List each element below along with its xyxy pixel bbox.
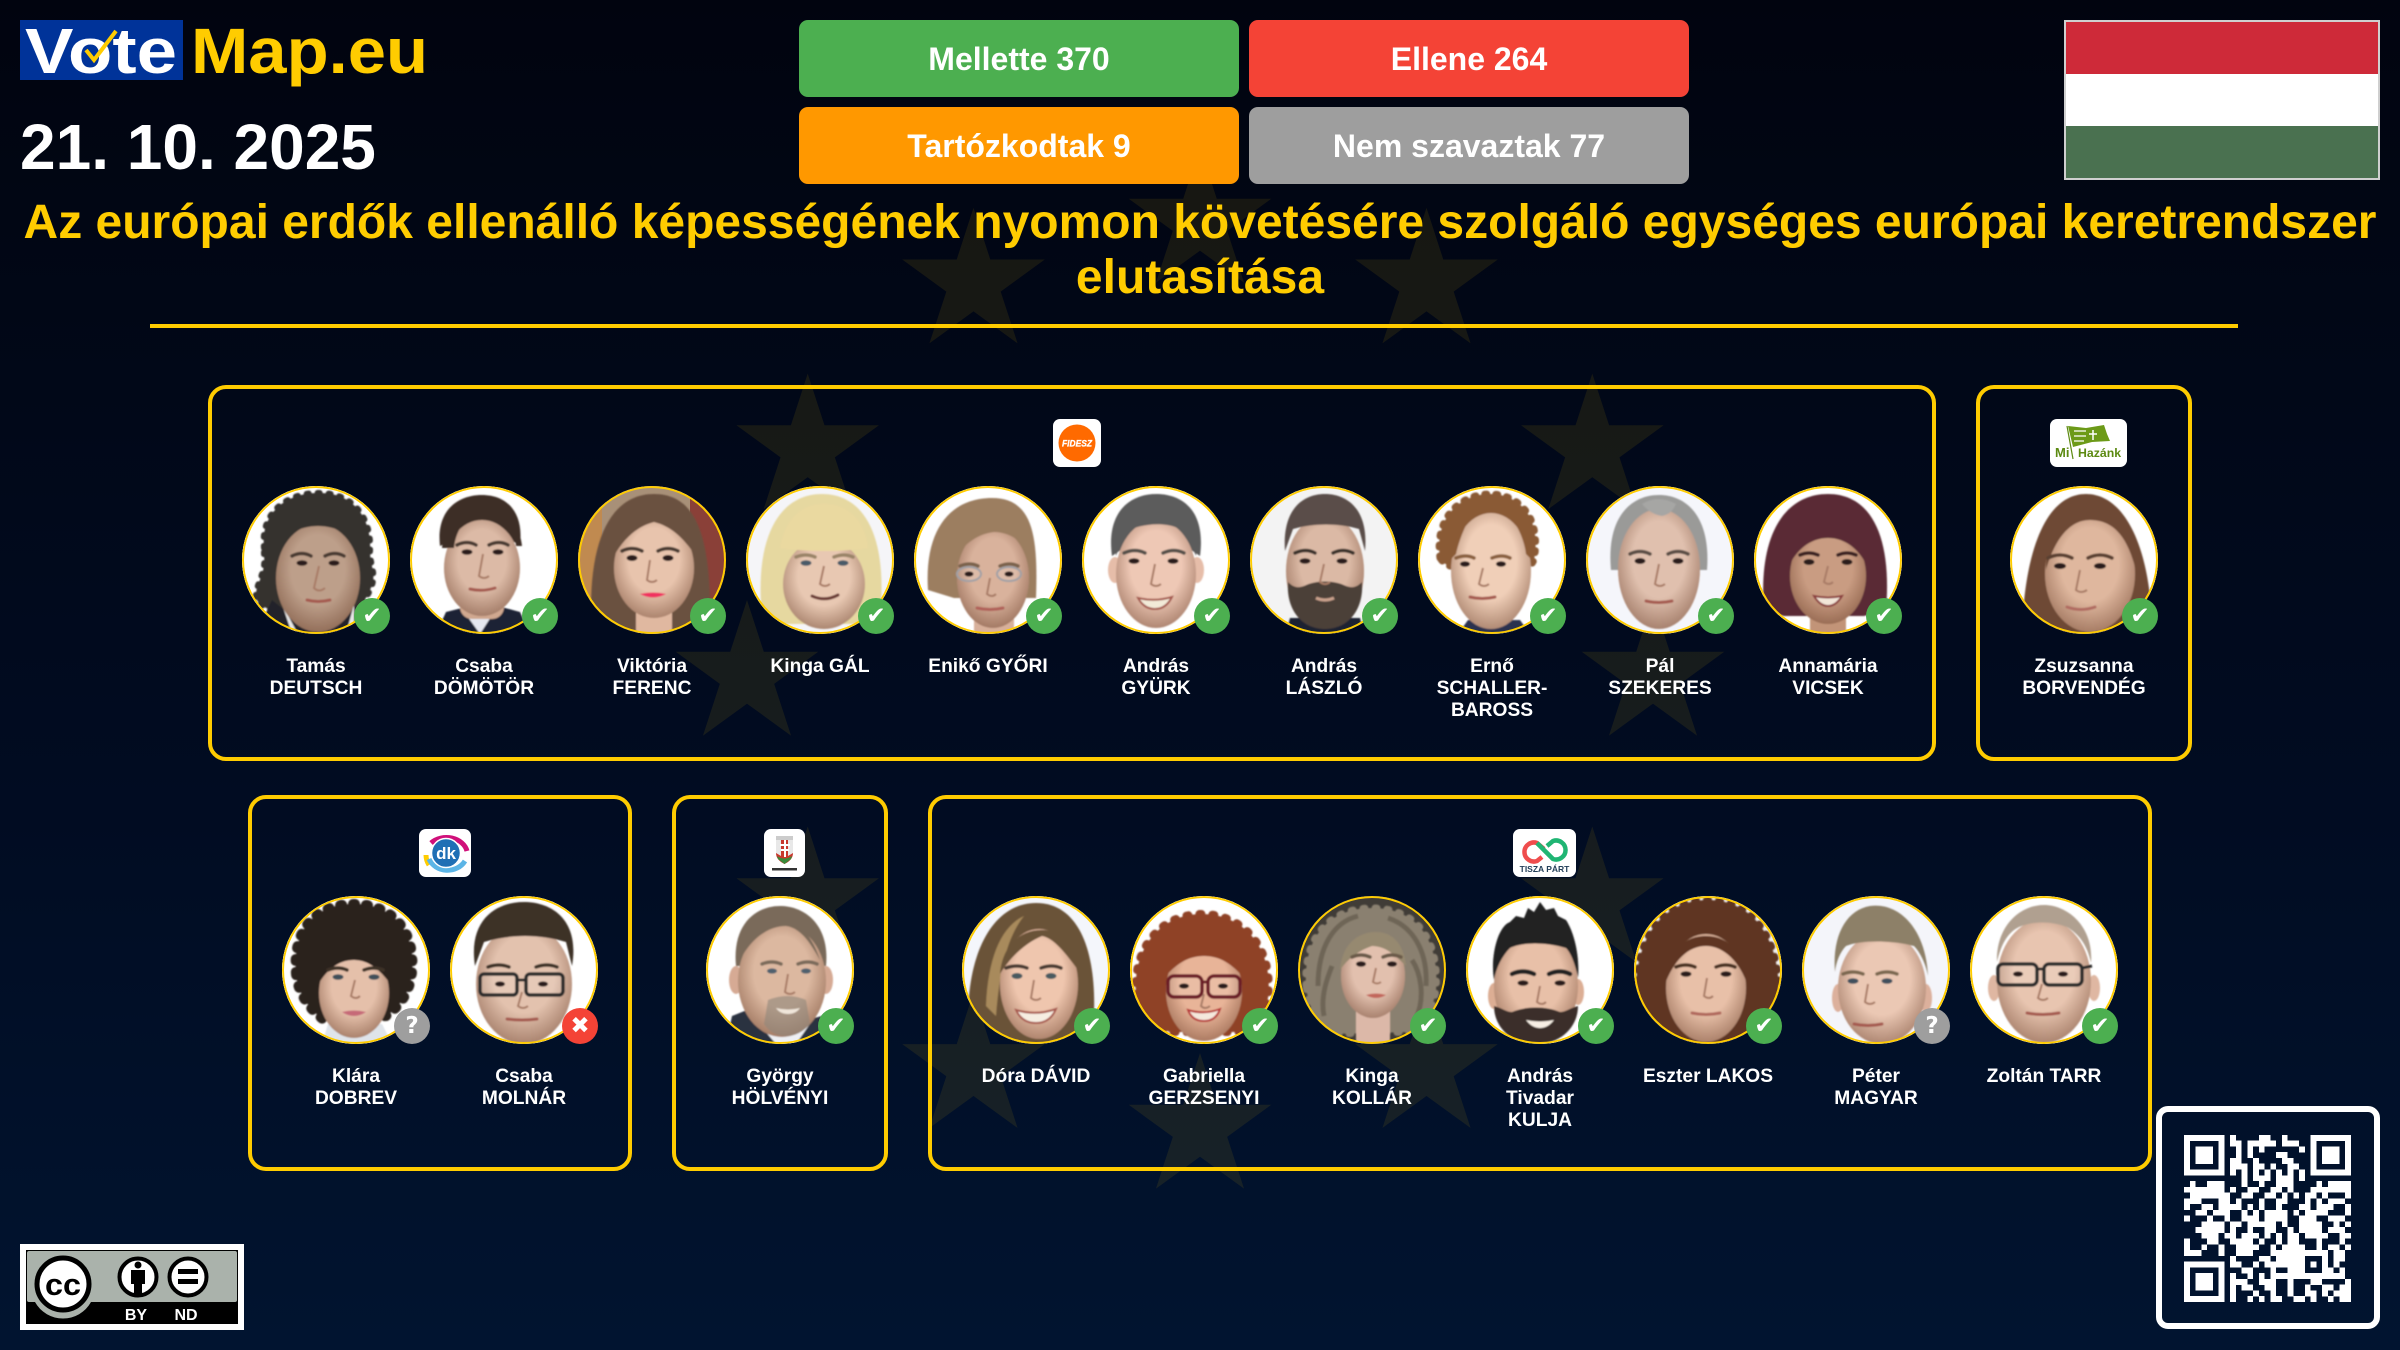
name bbox=[434, 656, 534, 699]
photo bbox=[706, 896, 854, 1044]
name: Csaba bbox=[455, 656, 513, 677]
panel: Mi Hazánk bbox=[1976, 385, 2192, 761]
button: against bbox=[1249, 20, 1689, 97]
name: Eszter LAKOS bbox=[1643, 1066, 1773, 1087]
photo bbox=[914, 486, 1062, 634]
name bbox=[1437, 656, 1547, 721]
name: György bbox=[746, 1066, 814, 1087]
name: BORVENDÉG bbox=[2022, 678, 2146, 699]
photo bbox=[1298, 896, 1446, 1044]
vote totals bbox=[799, 20, 1689, 184]
name: DÖMÖTÖR bbox=[434, 678, 534, 699]
panel: Fidesz bbox=[208, 385, 1936, 761]
vote badge: in favour: ✔ bbox=[1538, 602, 1558, 628]
name: Tamás bbox=[286, 656, 346, 677]
logo: DK bbox=[419, 829, 471, 877]
person: András László bbox=[1250, 486, 1398, 699]
vote badge: against: ✖ bbox=[570, 1012, 590, 1038]
photo bbox=[1754, 486, 1902, 634]
vote badge: in favour: ✔ bbox=[1082, 1012, 1102, 1038]
title: elutasítása bbox=[1076, 251, 1324, 304]
photo bbox=[1634, 896, 1782, 1044]
licence badge: CC BY-ND: cc bbox=[45, 1267, 81, 1302]
name: VICSEK bbox=[1792, 678, 1864, 699]
photo bbox=[450, 896, 598, 1044]
person: Eszter Lakos bbox=[1634, 896, 1782, 1087]
vote badge: in favour: ✔ bbox=[826, 1012, 846, 1038]
vote badge: did not vote: ? bbox=[1925, 1012, 1939, 1038]
person: György Hölvényi bbox=[706, 896, 854, 1109]
button: against: Ellene 264 bbox=[1391, 41, 1547, 77]
person: Tamás Deutsch bbox=[242, 486, 390, 699]
name: Kinga bbox=[1345, 1066, 1399, 1087]
licence badge: CC BY-ND: ND bbox=[174, 1307, 198, 1324]
logo: VoteMap.eu bbox=[20, 20, 428, 87]
vote badge: in favour bbox=[1194, 598, 1230, 634]
logo: Tisza bbox=[1513, 829, 1576, 877]
name bbox=[1121, 656, 1191, 699]
person: András Tivadar Kulja bbox=[1466, 896, 1614, 1131]
name bbox=[1149, 1066, 1259, 1109]
name: KOLLÁR bbox=[1332, 1088, 1412, 1109]
panel: KDNP bbox=[672, 795, 888, 1171]
name bbox=[1834, 1066, 1918, 1109]
person: Ernő Schaller-Baross bbox=[1418, 486, 1566, 721]
name: Annamária bbox=[1778, 656, 1878, 677]
button: did not vote: Nem szavaztak 77 bbox=[1333, 128, 1605, 164]
photo bbox=[1082, 486, 1230, 634]
photo bbox=[1802, 896, 1950, 1044]
logo: Fidesz: FIDESZ bbox=[1062, 438, 1093, 450]
vote badge: in favour bbox=[1866, 598, 1902, 634]
name: András bbox=[1291, 656, 1357, 677]
vote badge: in favour: ✔ bbox=[1202, 602, 1222, 628]
name: Kinga GÁL bbox=[770, 656, 870, 677]
name: Pál bbox=[1646, 656, 1674, 677]
person: Kinga Kollár bbox=[1298, 896, 1446, 1109]
vote badge: in favour bbox=[1026, 598, 1062, 634]
button: did not vote bbox=[1249, 107, 1689, 184]
name: SZEKERES bbox=[1608, 678, 1712, 699]
vote badge: in favour bbox=[818, 1008, 854, 1044]
name bbox=[1506, 1066, 1574, 1131]
person: Péter Magyar bbox=[1802, 896, 1950, 1109]
name: András bbox=[1507, 1066, 1573, 1087]
vote badge: in favour: ✔ bbox=[1874, 602, 1894, 628]
photo bbox=[242, 486, 390, 634]
person: Viktória Ferenc bbox=[578, 486, 726, 699]
vote badge: in favour: ✔ bbox=[1706, 602, 1726, 628]
person: Csaba Molnár bbox=[450, 896, 598, 1109]
licence badge: CC BY-ND: BY bbox=[125, 1307, 147, 1324]
button: in favour bbox=[799, 20, 1239, 97]
name bbox=[482, 1066, 566, 1109]
title bbox=[24, 196, 2376, 304]
name: Csaba bbox=[495, 1066, 553, 1087]
person: Klára Dobrev bbox=[282, 896, 430, 1109]
vote badge: in favour: ✔ bbox=[1034, 602, 1054, 628]
name: Zoltán TARR bbox=[1987, 1066, 2101, 1087]
panel: Tisza Párt bbox=[928, 795, 2152, 1171]
name bbox=[732, 1066, 828, 1109]
name: DEUTSCH bbox=[270, 678, 362, 699]
name: MOLNÁR bbox=[482, 1088, 566, 1109]
vote badge: in favour: ✔ bbox=[698, 602, 718, 628]
name: Tivadar bbox=[1506, 1088, 1574, 1109]
name: Klára bbox=[332, 1066, 380, 1087]
photo bbox=[746, 486, 894, 634]
photo bbox=[410, 486, 558, 634]
button: abstained bbox=[799, 107, 1239, 184]
photo bbox=[1418, 486, 1566, 634]
person: Pál Szekeres bbox=[1586, 486, 1734, 699]
name: Ernő bbox=[1470, 656, 1514, 677]
photo bbox=[2010, 486, 2158, 634]
button: in favour: Mellette 370 bbox=[928, 41, 1110, 77]
vote badge: in favour: ✔ bbox=[866, 602, 886, 628]
vote badge: did not vote bbox=[394, 1008, 430, 1044]
name: Zsuzsanna bbox=[2034, 656, 2134, 677]
photo bbox=[1586, 486, 1734, 634]
vote badge: in favour: ✔ bbox=[2090, 1012, 2110, 1038]
person: András Gyürk bbox=[1082, 486, 1230, 699]
name: BAROSS bbox=[1451, 700, 1533, 721]
photo bbox=[282, 896, 430, 1044]
logo: Fidesz bbox=[1053, 419, 1101, 467]
name: Péter bbox=[1852, 1066, 1900, 1087]
person: Kinga Gál bbox=[746, 486, 894, 677]
vote badge: did not vote: ? bbox=[405, 1012, 419, 1038]
vote badge: in favour bbox=[1698, 598, 1734, 634]
logo: Mi Hazánk bbox=[2050, 419, 2127, 467]
person: Gabriella Gerzsenyi bbox=[1130, 896, 1278, 1109]
name bbox=[2022, 656, 2146, 699]
vote badge: in favour: ✔ bbox=[530, 602, 550, 628]
panel: Demokratikus Koalíció bbox=[248, 795, 632, 1171]
person: Annamária Vicsek bbox=[1754, 486, 1902, 699]
logo: Mi Hazánk: Mi bbox=[2055, 445, 2069, 460]
name bbox=[1286, 656, 1362, 699]
name bbox=[1778, 656, 1878, 699]
flag: Hungary bbox=[2064, 20, 2380, 180]
vote badge: in favour bbox=[354, 598, 390, 634]
photo bbox=[1466, 896, 1614, 1044]
licence badge: CC BY-ND bbox=[20, 1244, 244, 1330]
name: Gabriella bbox=[1163, 1066, 1245, 1087]
photo bbox=[1250, 486, 1398, 634]
vote badge: in favour bbox=[690, 598, 726, 634]
photo bbox=[1130, 896, 1278, 1044]
name: LÁSZLÓ bbox=[1286, 678, 1362, 699]
name: Enikő GYŐRI bbox=[928, 656, 1048, 677]
person: Zoltán Tarr bbox=[1970, 896, 2118, 1132]
vote badge: against bbox=[562, 1008, 598, 1044]
QR code bbox=[2156, 1106, 2380, 1329]
person: Csaba Dömötör bbox=[410, 486, 558, 699]
photo bbox=[962, 896, 1110, 1044]
name: MAGYAR bbox=[1834, 1088, 1918, 1109]
name bbox=[1332, 1066, 1412, 1109]
button: abstained: Tartózkodtak 9 bbox=[907, 128, 1131, 164]
logo: Tisza: TISZA PÁRT bbox=[1520, 864, 1570, 874]
vote badge: in favour bbox=[1074, 1008, 1110, 1044]
vote badge: in favour: ✔ bbox=[2130, 602, 2150, 628]
vote badge: in favour: ✔ bbox=[1418, 1012, 1438, 1038]
vote badge: in favour bbox=[522, 598, 558, 634]
name: KULJA bbox=[1508, 1110, 1572, 1131]
vote badge: in favour bbox=[1746, 1008, 1782, 1044]
name: GERZSENYI bbox=[1149, 1088, 1259, 1109]
name: Dóra DÁVID bbox=[982, 1066, 1090, 1087]
vote badge: in favour: ✔ bbox=[1754, 1012, 1774, 1038]
photo bbox=[1970, 896, 2118, 1044]
name: GYÜRK bbox=[1121, 678, 1191, 699]
logo: DK: dk bbox=[436, 844, 456, 863]
logo: KDNP bbox=[764, 829, 805, 877]
vote badge: in favour: ✔ bbox=[1586, 1012, 1606, 1038]
vote badge: in favour bbox=[2122, 598, 2158, 634]
vote badge: in favour: ✔ bbox=[1370, 602, 1390, 628]
title: Az európai erdők ellenálló képességének nyomon követésére szolgáló egységes európai keretrendszer bbox=[24, 196, 2376, 249]
logo: Mi Hazánk: Hazánk bbox=[2078, 446, 2121, 460]
vote badge: in favour: ✔ bbox=[1250, 1012, 1270, 1038]
vote badge: did not vote bbox=[1914, 1008, 1950, 1044]
date: 21. 10. 2025 bbox=[20, 111, 376, 183]
person: Dóra Dávid bbox=[962, 896, 1110, 1087]
name: SCHALLER- bbox=[1437, 678, 1547, 699]
vote badge: in favour bbox=[1530, 598, 1566, 634]
name: András bbox=[1123, 656, 1189, 677]
name: FERENC bbox=[613, 678, 691, 699]
name: HÖLVÉNYI bbox=[732, 1088, 828, 1109]
person: Zsuzsanna Borvendég bbox=[2010, 486, 2158, 699]
photo bbox=[578, 486, 726, 634]
vote badge: in favour bbox=[2082, 1008, 2118, 1044]
vote badge: in favour bbox=[1362, 598, 1398, 634]
person: Enikő Győri bbox=[914, 486, 1062, 677]
vote badge: in favour bbox=[1410, 1008, 1446, 1044]
name bbox=[270, 656, 362, 699]
name bbox=[1608, 656, 1712, 699]
name: Viktória bbox=[617, 656, 687, 677]
name bbox=[315, 1066, 397, 1109]
vote badge: in favour bbox=[858, 598, 894, 634]
vote badge: in favour: ✔ bbox=[362, 602, 382, 628]
vote badge: in favour bbox=[1242, 1008, 1278, 1044]
name: DOBREV bbox=[315, 1088, 397, 1109]
vote badge: in favour bbox=[1578, 1008, 1614, 1044]
name bbox=[613, 656, 691, 699]
